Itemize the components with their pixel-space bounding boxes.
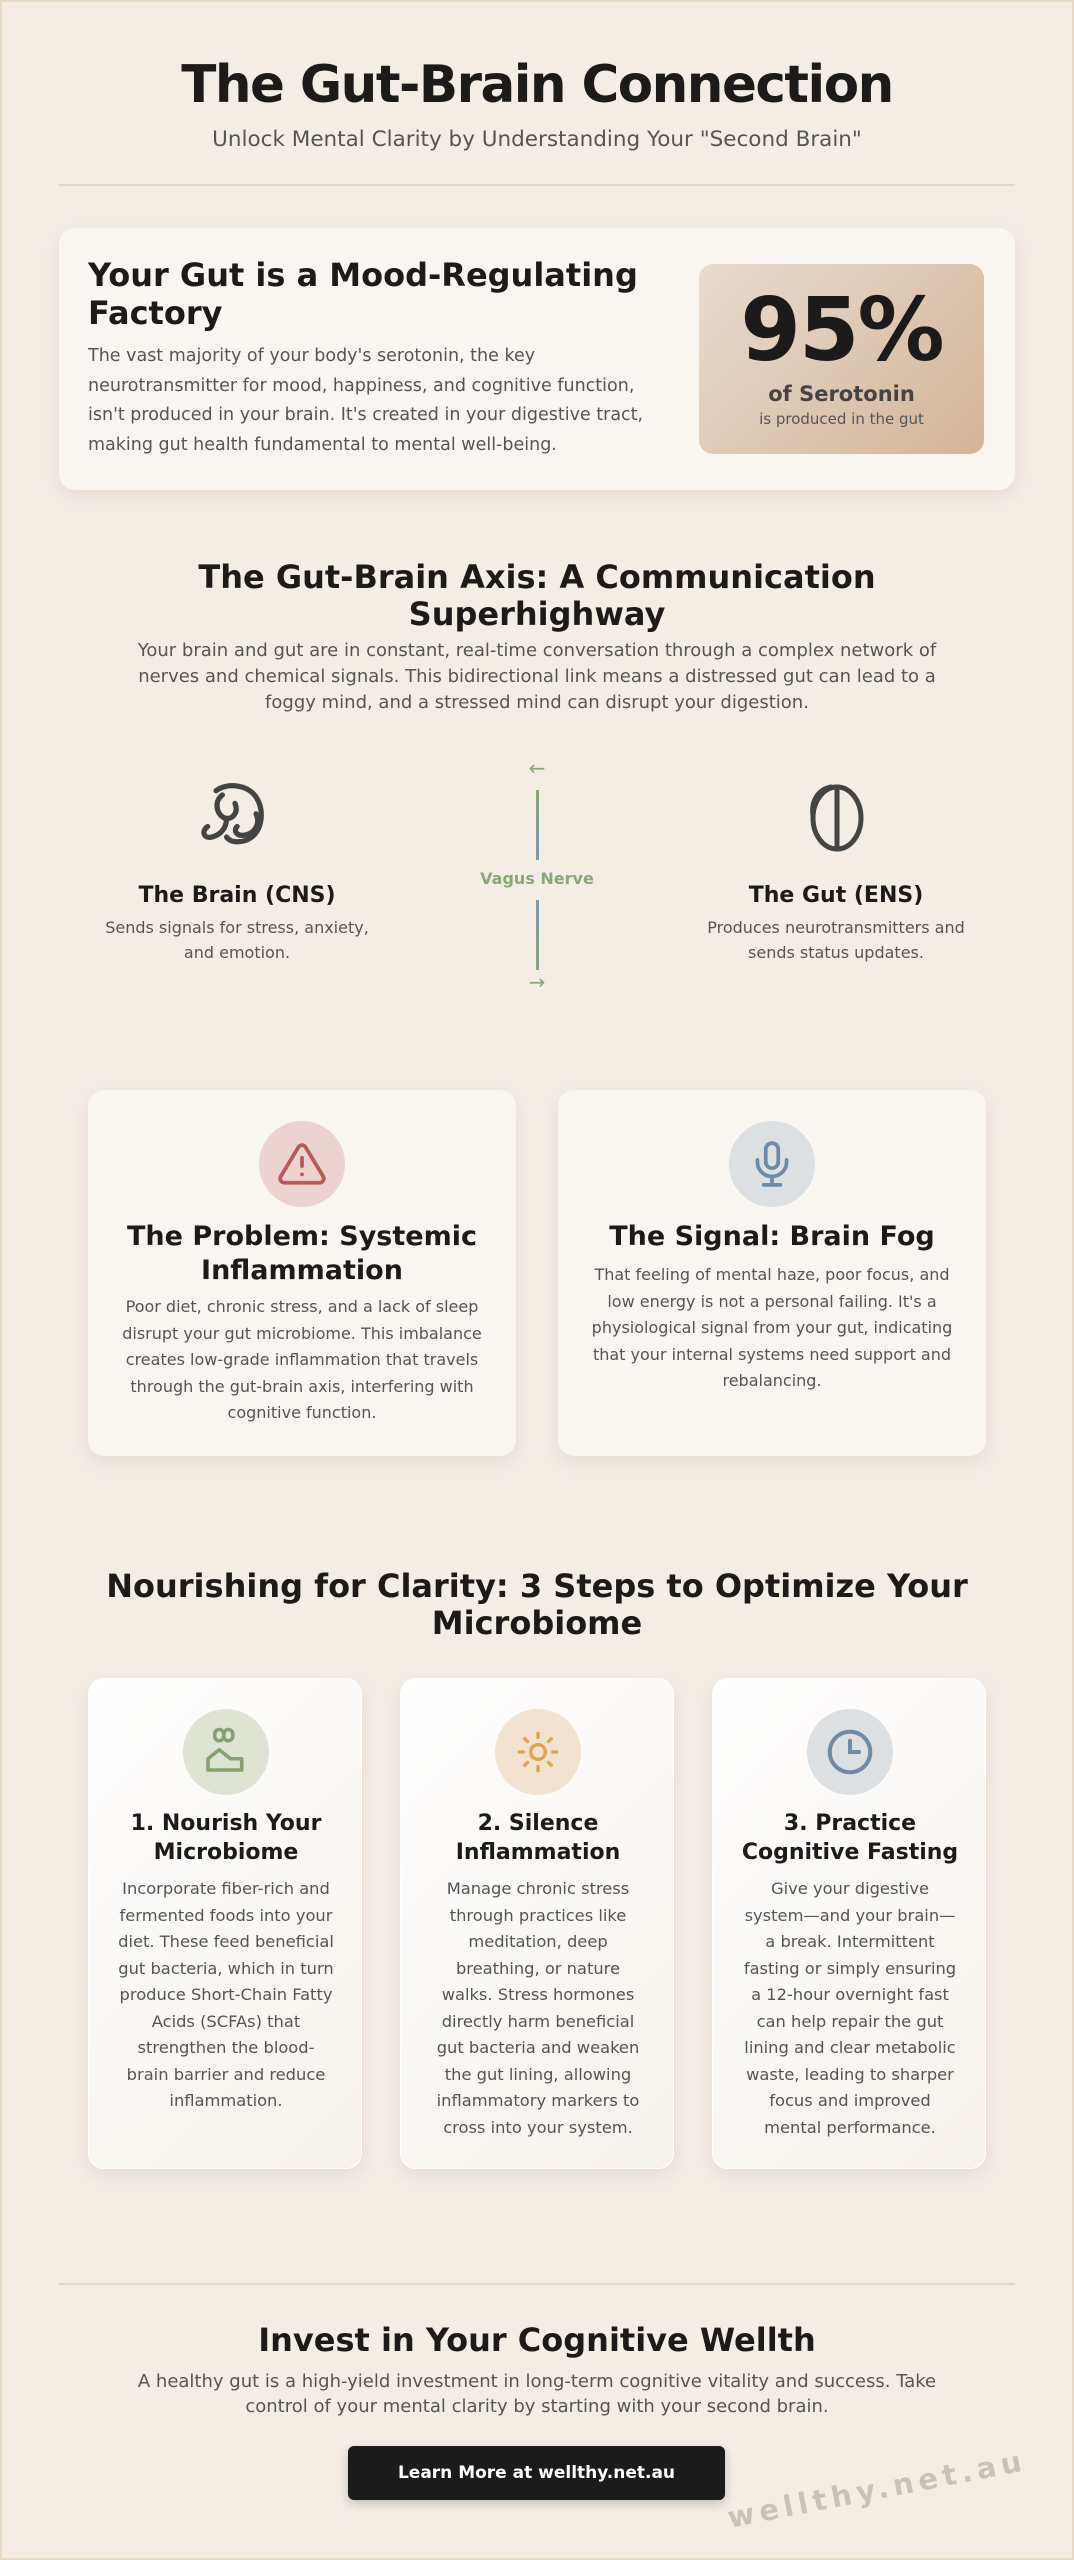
- panel: signal: The Signal: Brain Fog: [609, 1221, 935, 1252]
- icon: gut: [810, 784, 864, 852]
- panel: step 2: [400, 1678, 674, 2169]
- heading: mood factory: Your Gut is a Mood-Regulating Factory: [88, 256, 638, 332]
- icon: brain: [201, 783, 264, 844]
- icon: microbiome: [183, 1709, 269, 1795]
- text: gut: sends status updates.: [748, 943, 924, 962]
- panel: signal: That feeling of mental haze, poor focus, and low energy is not a personal failing. It's a physiological signal from your gut, indicating that your internal systems need support and rebalancing.: [592, 1265, 952, 1390]
- panel: step 2: Manage chronic stress through practices like meditation, deep breathing, or nature walks. Stress hormones directly harm beneficial gut bacteria and weaken the gut lining, allowing inflammatory markers to cross into your system.: [437, 1879, 639, 2136]
- stat box: 95%: [699, 264, 984, 454]
- icon: clock: [807, 1709, 893, 1795]
- text: invest: A healthy gut is a high-yield investment in long-term cognitive vitality and success. Take control of your mental clarity by starting with your second brain.: [138, 2371, 936, 2417]
- stat box: 95%: 95%: [740, 279, 943, 381]
- panel: serotonin: [59, 228, 1015, 490]
- text: brain: [105, 883, 369, 962]
- heading: nourishing: Nourishing for Clarity: 3 Steps to Optimize Your Microbiome: [106, 1567, 968, 1642]
- panel: step 3: [712, 1678, 986, 2169]
- icon: warning: [259, 1121, 345, 1207]
- panel: problem: The Problem: Systemic Inflammation: [127, 1221, 477, 1286]
- panel: signal: [558, 1090, 986, 1456]
- arrow: vagus nerve: ←: [529, 756, 545, 780]
- panel: step 1: [88, 1678, 362, 2169]
- text: serotonin body: The vast majority of your body's serotonin, the key neurotransmitter for mood, happiness, and cognitive function, isn't produced in your brain. It's created in your digestive tract, making gut health fundamental to mental well-being.: [88, 346, 643, 454]
- arrow: vagus nerve: →: [529, 970, 545, 994]
- title: The Gut-Brain Connection: [181, 55, 893, 115]
- text: brain: The Brain (CNS): [138, 883, 336, 908]
- subtitle: Unlock Mental Clarity by Understanding Your "Second Brain": [212, 127, 862, 152]
- text: axis intro: Your brain and gut are in constant, real-time conversation through a complex network of nerves and chemical signals. This bidirectional link means a distressed gut can lead to a foggy mind, and a stressed mind can disrupt your digestion.: [138, 640, 936, 713]
- arrow: vagus nerve: Vagus Nerve: [480, 869, 594, 888]
- button: learn more: [348, 2446, 725, 2500]
- heading: axis: The Gut-Brain Axis: A Communication Superhighway: [198, 558, 876, 633]
- panel: step 2: 2. Silence Inflammation: [456, 1811, 620, 1865]
- text: gut: Produces neurotransmitters and: [707, 918, 965, 937]
- text: brain: Sends signals for stress, anxiety,: [105, 918, 369, 937]
- stat box: 95%: is produced in the gut: [759, 410, 924, 428]
- heading: invest: Invest in Your Cognitive Wellth: [258, 2321, 816, 2359]
- panel: step 1: Incorporate fiber-rich and fermented foods into your diet. These feed beneficial gut bacteria, which in turn produce Short-Chain Fatty Acids (SCFAs) that strengthen the blood-brain barrier and reduce inflammation.: [118, 1879, 334, 2110]
- icon: sun: [495, 1709, 581, 1795]
- panel: step 1: 1. Nourish Your Microbiome: [131, 1811, 321, 1865]
- panel: step 3: 3. Practice Cognitive Fasting: [742, 1811, 958, 1865]
- watermark: wellthy.net.au: [725, 2443, 1029, 2535]
- icon: microphone: [729, 1121, 815, 1207]
- text: gut: The Gut (ENS): [749, 883, 923, 908]
- stat box: 95%: of Serotonin: [768, 382, 915, 406]
- button: learn more: Learn More at wellthy.net.au: [398, 2463, 675, 2483]
- panel: problem: [88, 1090, 516, 1456]
- arrow: vagus nerve: [480, 756, 594, 994]
- panel: step 3: Give your digestive system—and your brain—a break. Intermittent fasting or simply ensuring a 12-hour overnight fast can help repair the gut lining and clear metabolic waste, leading to sharper focus and improved mental performance.: [744, 1879, 956, 2136]
- text: gut: [707, 883, 965, 962]
- text: brain: and emotion.: [184, 943, 290, 962]
- panel: problem: Poor diet, chronic stress, and a lack of sleep disrupt your gut microbiome. This imbalance creates low-grade inflammation that travels through the gut-brain axis, interfering with cognitive function.: [122, 1297, 482, 1422]
